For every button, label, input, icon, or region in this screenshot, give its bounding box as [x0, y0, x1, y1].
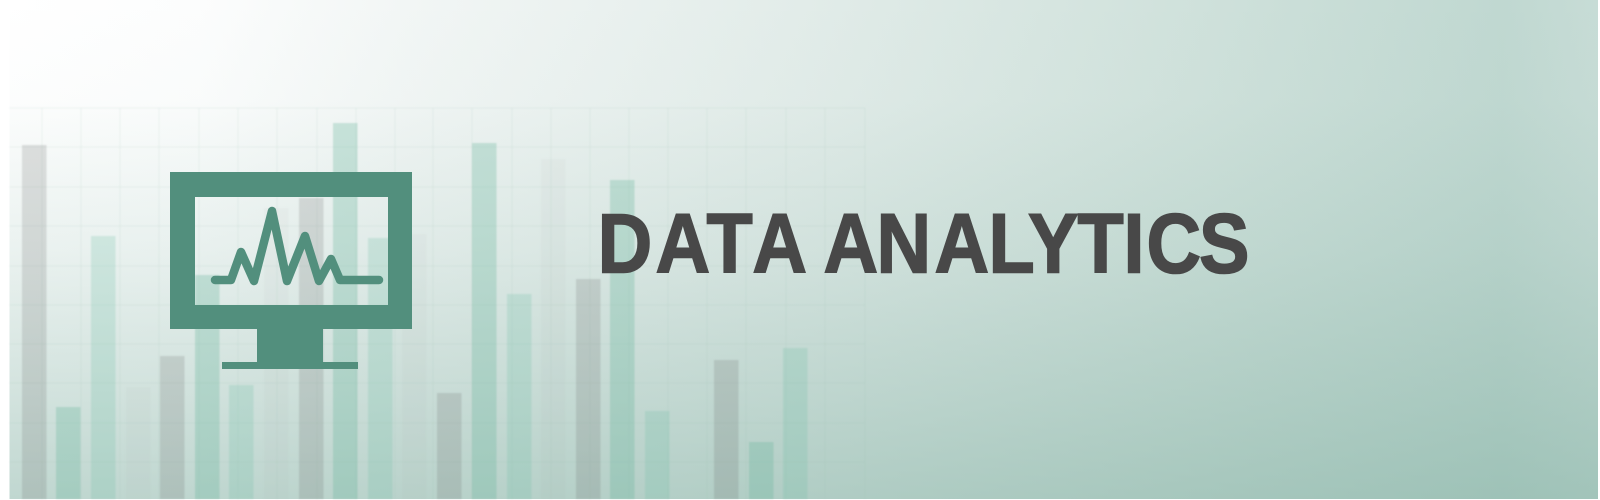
light green bars [91, 236, 808, 499]
faint bars [126, 159, 566, 499]
bar chart: background bars [22, 123, 808, 499]
dark green bars [56, 123, 774, 499]
title: DATA ANALYTICS [598, 197, 1249, 290]
gray bars [22, 145, 738, 499]
icon: monitor with pulse line [170, 172, 412, 369]
